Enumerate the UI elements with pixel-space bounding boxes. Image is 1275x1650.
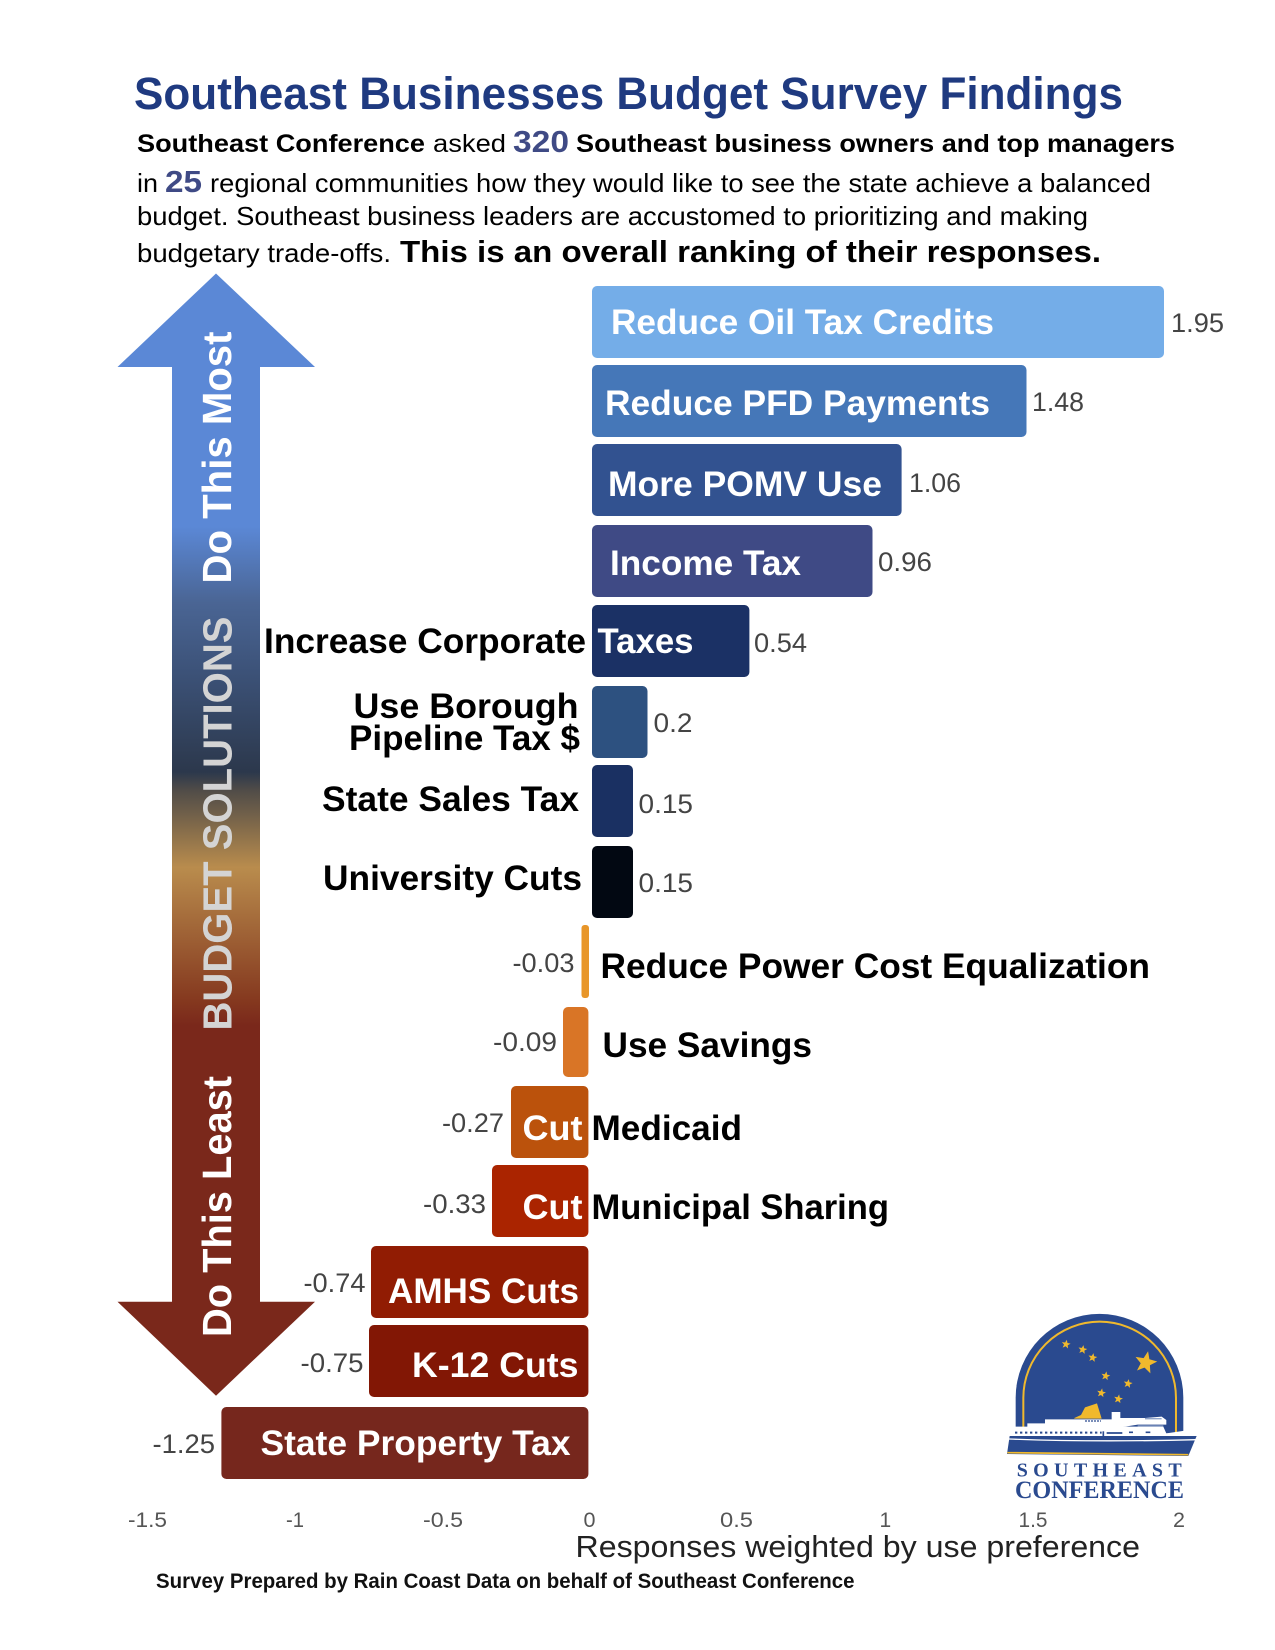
bar: Income Tax 0.96: Income Tax (610, 543, 801, 583)
bar: K-12 Cuts -0.75 (300, 1325, 588, 1397)
x axis tick labels: 1 (880, 1509, 891, 1532)
bar: Reduce Power Cost Equalization -0.03: -0.03 (512, 948, 574, 978)
x axis tick labels: -1 (286, 1509, 304, 1532)
intro text block: budgetary trade-offs. (137, 238, 391, 268)
bar: Cut Municipal Sharing -0.33: Cut (522, 1187, 583, 1227)
bar: University Cuts 0.15: University Cuts (323, 858, 582, 898)
intro text block: Southeast business owners and top managers (576, 130, 1175, 158)
bar: AMHS Cuts -0.74: -0.74 (304, 1268, 366, 1298)
intro text block: 25 (165, 164, 202, 199)
logo dome (1016, 1314, 1183, 1433)
bar: Reduce PFD Payments 1.48 (592, 365, 1084, 437)
logo wordmark: CONFERENCE (1015, 1477, 1184, 1504)
intro text block: asked (433, 130, 506, 158)
x axis tick labels: 0.5 (720, 1509, 753, 1532)
bar: Reduce Oil Tax Credits 1.95: Reduce Oil Tax Credits (611, 302, 994, 342)
arrow: budget solutions double-headed scale: Do This Least (194, 1076, 240, 1337)
bar: Cut Municipal Sharing -0.33: Municipal Sharing (592, 1187, 889, 1227)
x axis tick labels: 0 (584, 1509, 596, 1532)
x axis tick labels: 1.5 (1018, 1509, 1048, 1532)
logo artwork (1007, 1314, 1200, 1456)
arrow: budget solutions double-headed scale: Do This Most (194, 331, 240, 584)
bar: State Sales Tax 0.15 (322, 765, 693, 837)
bar: Cut Municipal Sharing -0.33 (423, 1165, 889, 1237)
intro text block: This is an overall ranking of their responses. (400, 234, 1101, 269)
logo wordmark: SOUTHEAST (1017, 1460, 1182, 1482)
intro text block (137, 124, 1175, 269)
intro text block: in (137, 168, 158, 198)
intro text block: budget. Southeast business leaders are accustomed to prioritizing and making (137, 201, 1088, 231)
logo ferry (1007, 1403, 1200, 1456)
intro text block: 320 (513, 124, 569, 159)
logo stars (1061, 1339, 1159, 1403)
x axis title: Responses weighted by use preference (576, 1529, 1140, 1564)
bar: AMHS Cuts -0.74 (304, 1246, 588, 1318)
bar: Increase Corporate Taxes 0.54 (264, 605, 807, 677)
intro text block: Southeast Conference (137, 130, 425, 158)
intro text block: regional communities how they would like to see the state achieve a balanced (210, 168, 1151, 198)
title: Southeast Businesses Budget Survey Findings (134, 68, 1123, 119)
bar: Reduce PFD Payments 1.48: 1.48 (1032, 387, 1084, 417)
bar: Cut Municipal Sharing -0.33: -0.33 (423, 1189, 486, 1219)
bar: More POMV Use 1.06 (592, 444, 961, 516)
bar: K-12 Cuts -0.75: -0.75 (300, 1348, 364, 1378)
logo: Southeast Conference (1007, 1314, 1200, 1504)
footer credit: Survey Prepared by Rain Coast Data on behalf of Southeast Conference (156, 1570, 854, 1593)
bar: Increase Corporate Taxes 0.54: Increase Corporate (264, 621, 586, 661)
bar: Cut Medicaid -0.27: Cut (522, 1108, 583, 1148)
bar: Use Borough Pipeline Tax $ 0.2 (349, 686, 692, 758)
bar: Use Borough Pipeline Tax $ 0.2: 0.2 (654, 708, 692, 738)
x axis tick labels (128, 1509, 1185, 1532)
bar: State Sales Tax 0.15: State Sales Tax (322, 779, 579, 819)
bar: Cut Medicaid -0.27: -0.27 (442, 1108, 504, 1138)
arrow: budget solutions double-headed scale: BUDGET SOLUTIONS (194, 616, 240, 1030)
bar: AMHS Cuts -0.74: AMHS Cuts (388, 1271, 579, 1311)
bar: University Cuts 0.15 (323, 846, 693, 918)
bar: Reduce Power Cost Equalization -0.03: Reduce Power Cost Equalization (600, 946, 1150, 986)
bar: State Property Tax -1.25 (152, 1407, 588, 1479)
bar: Reduce Oil Tax Credits 1.95 (592, 286, 1224, 358)
bar: Use Borough Pipeline Tax $ 0.2: Use Borough (354, 686, 578, 726)
bar: More POMV Use 1.06: More POMV Use (608, 464, 882, 504)
x axis tick labels: 2 (1173, 1509, 1185, 1532)
bar: State Property Tax -1.25: -1.25 (152, 1429, 215, 1459)
bar: State Property Tax -1.25: State Property Tax (260, 1423, 571, 1463)
bar: State Sales Tax 0.15: 0.15 (638, 789, 693, 819)
bar: Increase Corporate Taxes 0.54: Taxes (598, 621, 694, 661)
bar: Increase Corporate Taxes 0.54: 0.54 (754, 628, 807, 658)
logo wordmark (1015, 1460, 1184, 1504)
bar: Cut Medicaid -0.27: Medicaid (592, 1108, 742, 1148)
bar: University Cuts 0.15: 0.15 (638, 868, 693, 898)
bar: Income Tax 0.96: 0.96 (878, 547, 932, 577)
bar: More POMV Use 1.06: 1.06 (909, 468, 961, 498)
x axis tick labels: -0.5 (423, 1509, 463, 1532)
bar: Reduce Power Cost Equalization -0.03 (512, 925, 1150, 998)
bar: Use Savings -0.09: Use Savings (602, 1025, 812, 1065)
bar: Use Savings -0.09 (493, 1007, 812, 1077)
bar: Use Borough Pipeline Tax $ 0.2: Pipeline Tax $ (349, 718, 580, 758)
bar: Use Savings -0.09: -0.09 (493, 1027, 557, 1057)
arrow: budget solutions double-headed scale (118, 274, 315, 1396)
x axis tick labels: -1.5 (128, 1509, 167, 1532)
bar: Income Tax 0.96 (592, 525, 932, 597)
bar: Reduce Oil Tax Credits 1.95: 1.95 (1171, 308, 1224, 338)
bar: Cut Medicaid -0.27 (442, 1086, 742, 1158)
bar: Reduce PFD Payments 1.48: Reduce PFD Payments (605, 383, 990, 423)
bar: K-12 Cuts -0.75: K-12 Cuts (412, 1345, 578, 1385)
